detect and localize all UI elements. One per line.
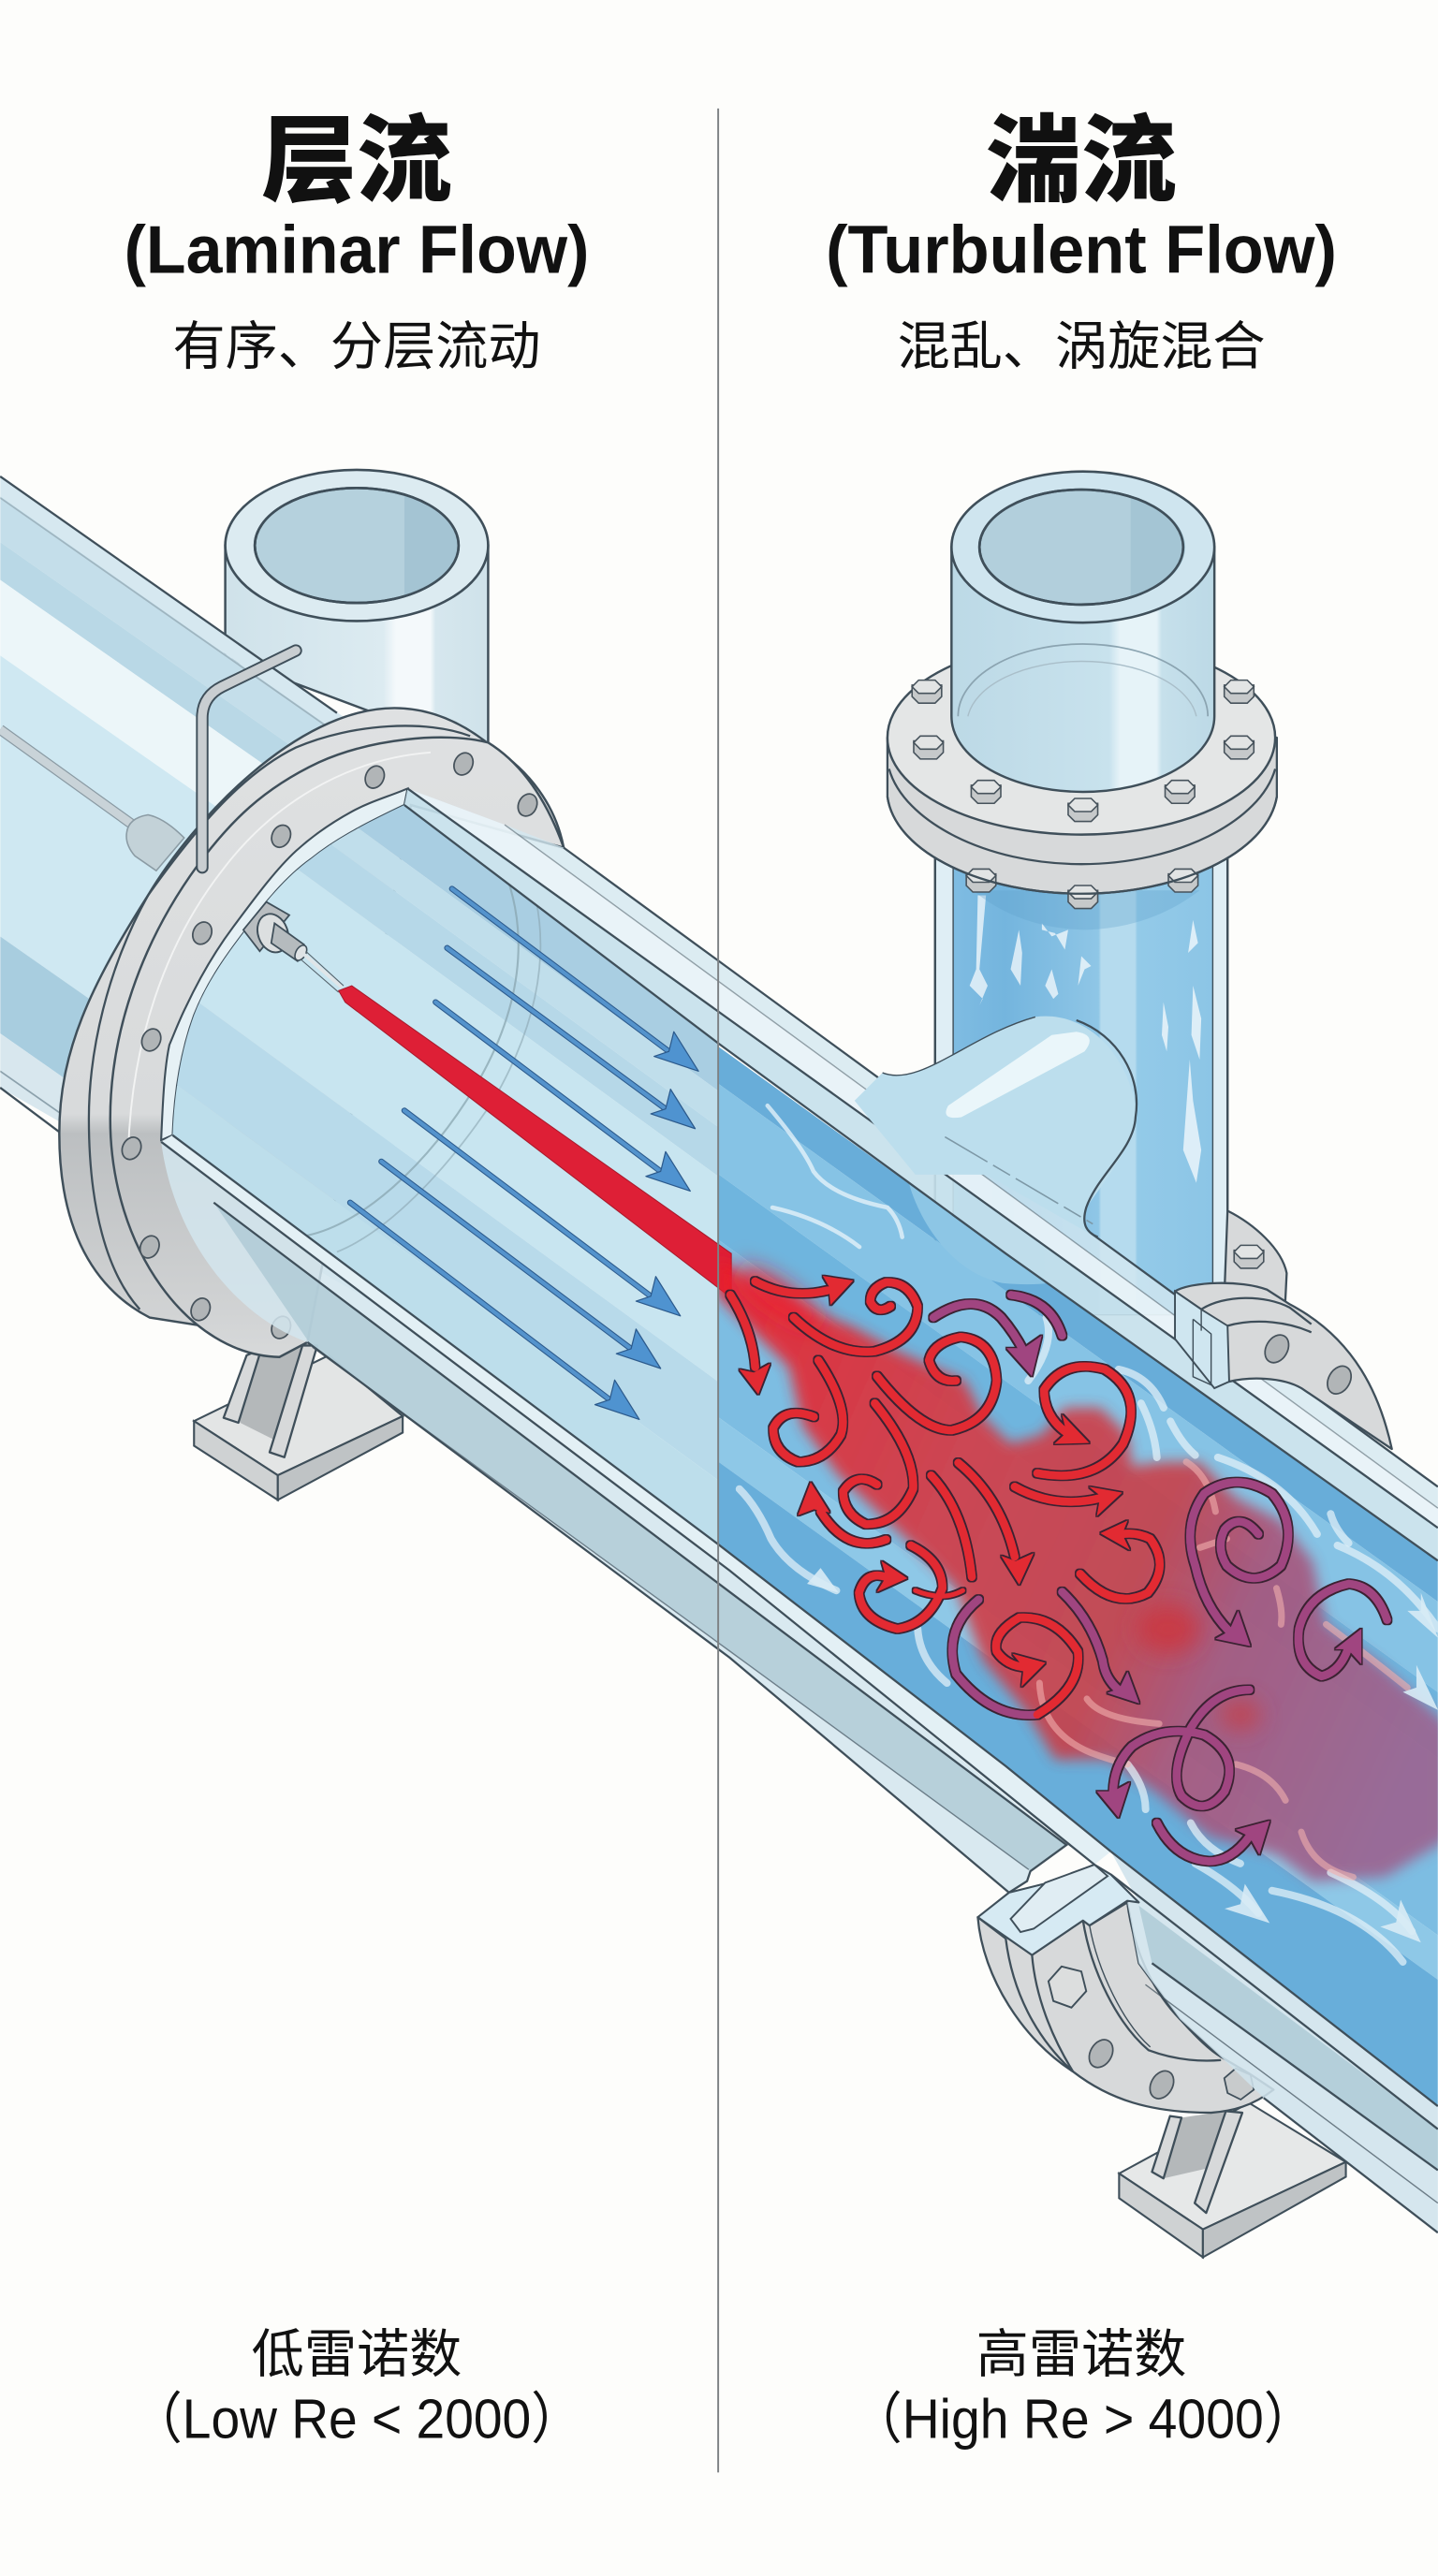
swirl J (959, 1463, 1034, 1585)
upper clamp (1175, 1283, 1392, 1449)
swirl S (1097, 1690, 1250, 1818)
swirl H (859, 1545, 943, 1629)
swirl N (1080, 1520, 1160, 1599)
footer: turbulent Reynolds number: 高雷诺数 (976, 2324, 1186, 2383)
title: laminar English: (Laminar Flow) (125, 212, 589, 287)
swirl O (952, 1600, 1078, 1715)
injection rod and capsule (0, 729, 184, 871)
swirl T (1157, 1821, 1269, 1861)
water streaks (740, 1318, 1438, 1962)
handle rod (202, 651, 296, 868)
arrow 4 (404, 1110, 681, 1316)
swirl L (1037, 1367, 1131, 1475)
left flange (59, 708, 564, 1357)
swirl D (877, 1337, 997, 1430)
swirl P (1062, 1592, 1139, 1704)
flange front plate (110, 738, 564, 1357)
subtitle: turbulent: 混乱、涡旋混合 (897, 317, 1266, 376)
swirl F (844, 1403, 913, 1524)
title: turbulent Chinese: 湍流 (986, 108, 1177, 214)
swirl B (730, 1295, 770, 1394)
lower glass wall: right of clamp (1111, 1852, 1438, 2232)
opening rim (161, 788, 407, 1140)
T-junction glass bulge (855, 1017, 1137, 1237)
swirl M (1015, 1486, 1123, 1516)
white flow arrowheads (807, 1568, 1438, 1942)
arrow 3 (435, 1003, 690, 1191)
left section of horizontal pipe (0, 477, 395, 1244)
pink mixing streaks (1039, 1462, 1407, 1877)
title: turbulent English: (Turbulent Flow) (826, 212, 1337, 287)
footer: turbulent Reynolds number: （High Re > 4000） (850, 2388, 1315, 2451)
heading: turbulent (826, 108, 1337, 376)
support: right pipe stand (1119, 2103, 1346, 2258)
turbulent flow contents (717, 1258, 1438, 1962)
turbulent water section (707, 985, 1438, 2133)
footer: laminar Reynolds number: 低雷诺数 (252, 2324, 462, 2383)
swirl G (798, 1482, 886, 1544)
lower glass wall: left of notch (161, 1135, 1111, 1893)
dye injection nozzle (243, 902, 344, 992)
swirl K (933, 1304, 1042, 1376)
title: laminar Chinese: 层流 (261, 108, 452, 214)
swirl C (794, 1282, 917, 1352)
flange back plate (59, 708, 564, 1342)
lower clamp flange (977, 1902, 1273, 2113)
flange top bolts (912, 681, 1254, 822)
clamp hex bolt (1049, 1967, 1086, 2008)
flange bolt holes (119, 750, 540, 1341)
swirl arrows (730, 1276, 1387, 1861)
streak I (932, 1475, 972, 1577)
heading: laminar (125, 108, 589, 376)
arrow 2 (448, 948, 696, 1129)
footer: turbulent Reynolds number (850, 2324, 1315, 2451)
footer: laminar Reynolds number (131, 2324, 582, 2451)
support: left pipe stand (194, 1344, 403, 1500)
streak H2 (916, 1590, 962, 1596)
laminar flow arrows (350, 889, 698, 1419)
red dye cloud (717, 1258, 1438, 1881)
left vertical pipe (226, 470, 488, 755)
laminar section interior (172, 805, 717, 1543)
upper clamp rear flange (1225, 1211, 1286, 1306)
arrow 1 (452, 889, 698, 1071)
upper water streaks (768, 1105, 902, 1247)
water streaks in tube (970, 896, 1201, 1183)
red dye stream (339, 986, 731, 1298)
flange seam (89, 725, 470, 1310)
swirl E (773, 1360, 843, 1462)
center divider (717, 109, 719, 2472)
footer: laminar Reynolds number: （Low Re < 2000） (131, 2388, 582, 2451)
right vertical pipe lower with water (935, 822, 1227, 1314)
swirl R (1299, 1584, 1387, 1676)
upper glass wall (404, 788, 1438, 1560)
pipe outline: left section edges (0, 476, 337, 1137)
subtitle: laminar: 有序、分层流动 (172, 317, 541, 376)
right vertical flange (888, 640, 1277, 909)
clamp tab (1011, 1865, 1108, 1932)
swirl K2 (1011, 1295, 1062, 1336)
lower clamp glass top plate (977, 1865, 1138, 1955)
arrow 5 (381, 1162, 661, 1368)
swirl Q (1190, 1482, 1288, 1647)
water shadow beneath flange (973, 890, 1199, 929)
junction bulge seen through water (909, 1184, 1046, 1284)
arrow 6 (350, 1203, 639, 1419)
lower bolt heads (966, 869, 1198, 909)
right upper tube (951, 472, 1214, 792)
swirl A (756, 1276, 853, 1305)
